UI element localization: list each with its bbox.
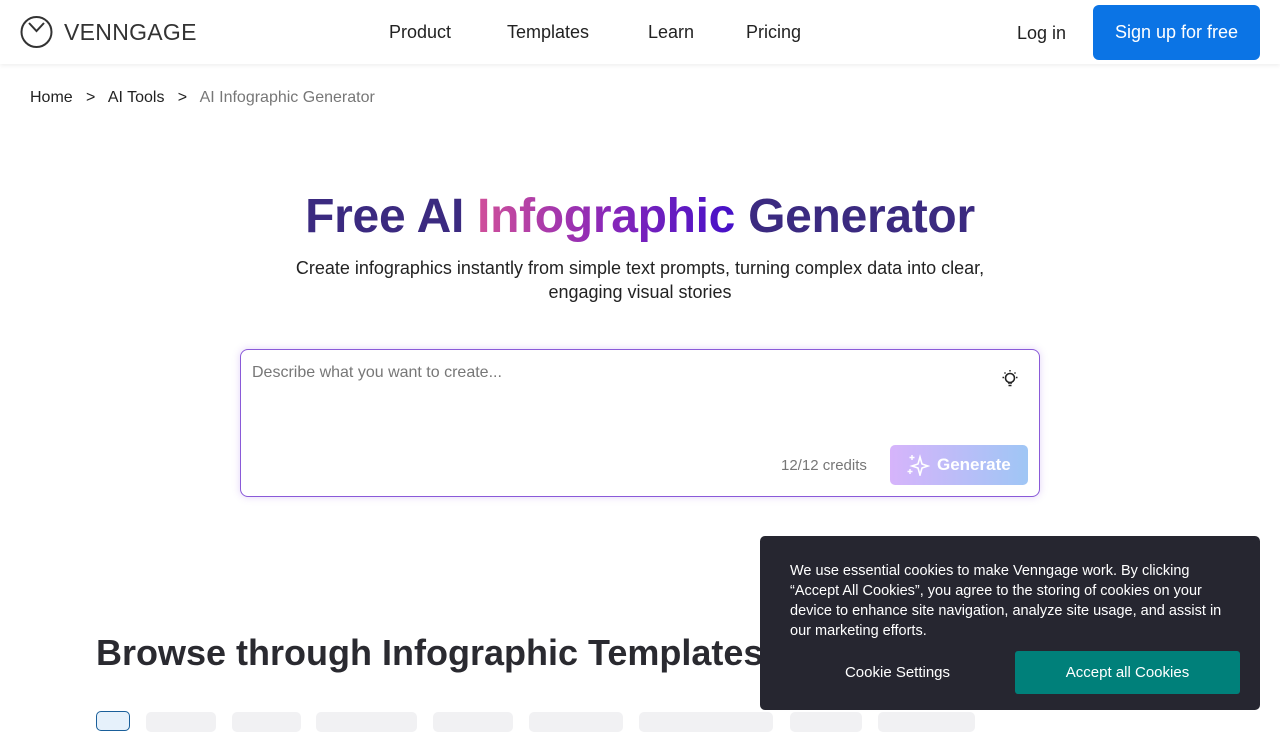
icon: lightbulb: [1002, 370, 1018, 386]
section heading: Browse through Infographic Templates: [96, 632, 763, 673]
title: Free AI Infographic Generator: [305, 190, 975, 243]
placeholder: Describe what you want to create...: [252, 364, 502, 381]
cookie settings button: Cookie Settings: [845, 664, 950, 681]
header bar: [0, 0, 1280, 64]
cookie banner: [760, 536, 1260, 710]
category chips: [96, 711, 975, 732]
credits: 12/12 credits: [781, 457, 867, 474]
accept button: [1015, 651, 1240, 694]
cookie text: We use essential cookies to make Venngage work. By clicking “Accept All Cookies”, you agree to the storing of cookies on your device to enhance site navigation, analyze site usage, and assist in our marketing efforts.: [790, 563, 1221, 639]
subtitle: Create infographics instantly from simple text prompts, turning complex data into clear, engaging visual stories: [296, 258, 984, 302]
prompt box: [240, 349, 1040, 497]
generate button: [890, 445, 1028, 485]
logo: VENNGAGE: [64, 19, 197, 45]
nav links: Product: [389, 22, 451, 42]
accept button: Accept all Cookies: [1066, 664, 1189, 681]
signup button: [1093, 5, 1260, 60]
header bar: Templates: [507, 22, 589, 42]
breadcrumb: Home > AI Tools > AI Infographic Generator: [30, 89, 375, 106]
header bar: Learn: [648, 22, 694, 42]
logo: [20, 16, 197, 48]
signup button: Sign up for free: [1115, 22, 1238, 42]
login link: Log in: [1017, 23, 1066, 43]
generate button: Generate: [937, 455, 1011, 474]
header bar: Pricing: [746, 22, 801, 42]
